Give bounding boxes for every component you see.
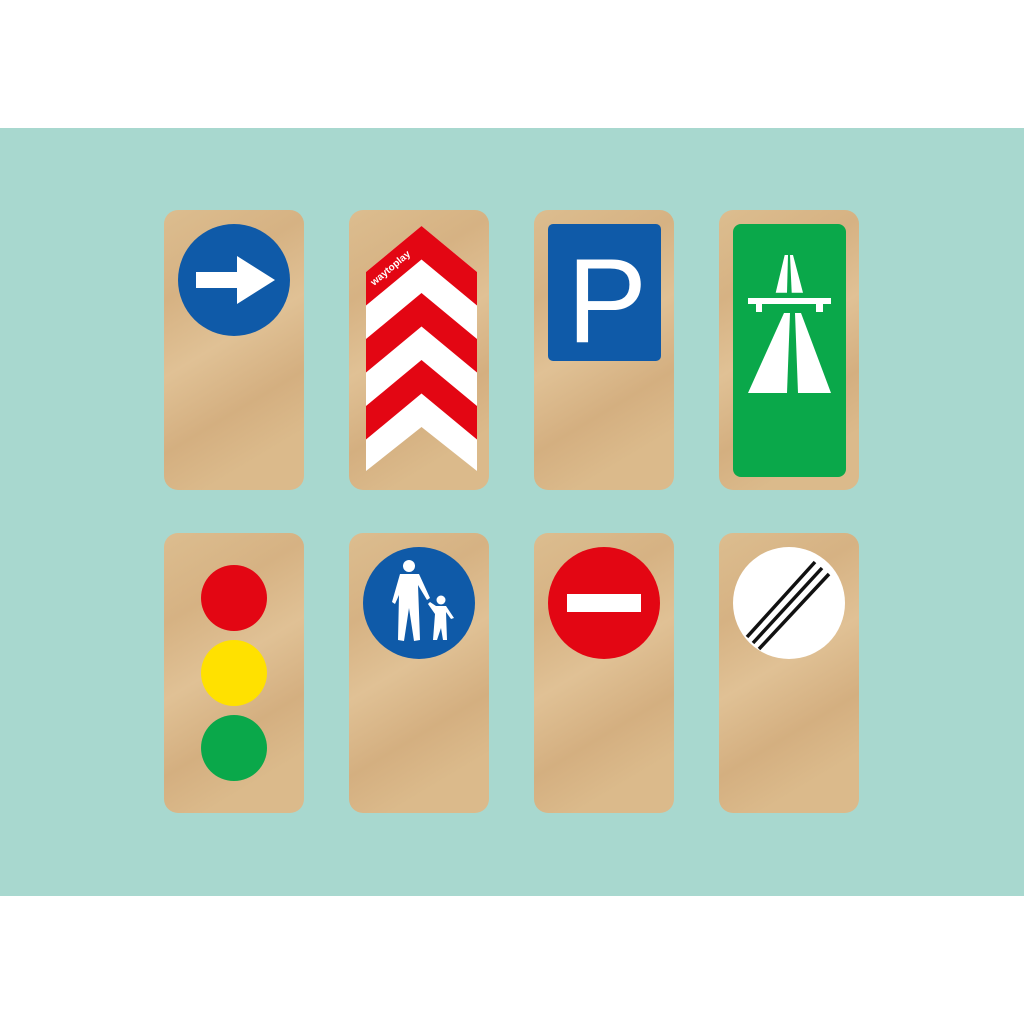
teal background band [0, 128, 1024, 896]
board: motorway [719, 210, 859, 490]
board: traffic light [164, 533, 304, 813]
board: direction arrow [164, 210, 304, 490]
board: chevron [349, 210, 489, 490]
board: chevron: waytoplay [368, 249, 413, 289]
board: pedestrians [349, 533, 489, 813]
board: end of restrictions [719, 533, 859, 813]
board: parking: P [567, 234, 647, 368]
board: parking [534, 210, 674, 490]
board: no entry [534, 533, 674, 813]
